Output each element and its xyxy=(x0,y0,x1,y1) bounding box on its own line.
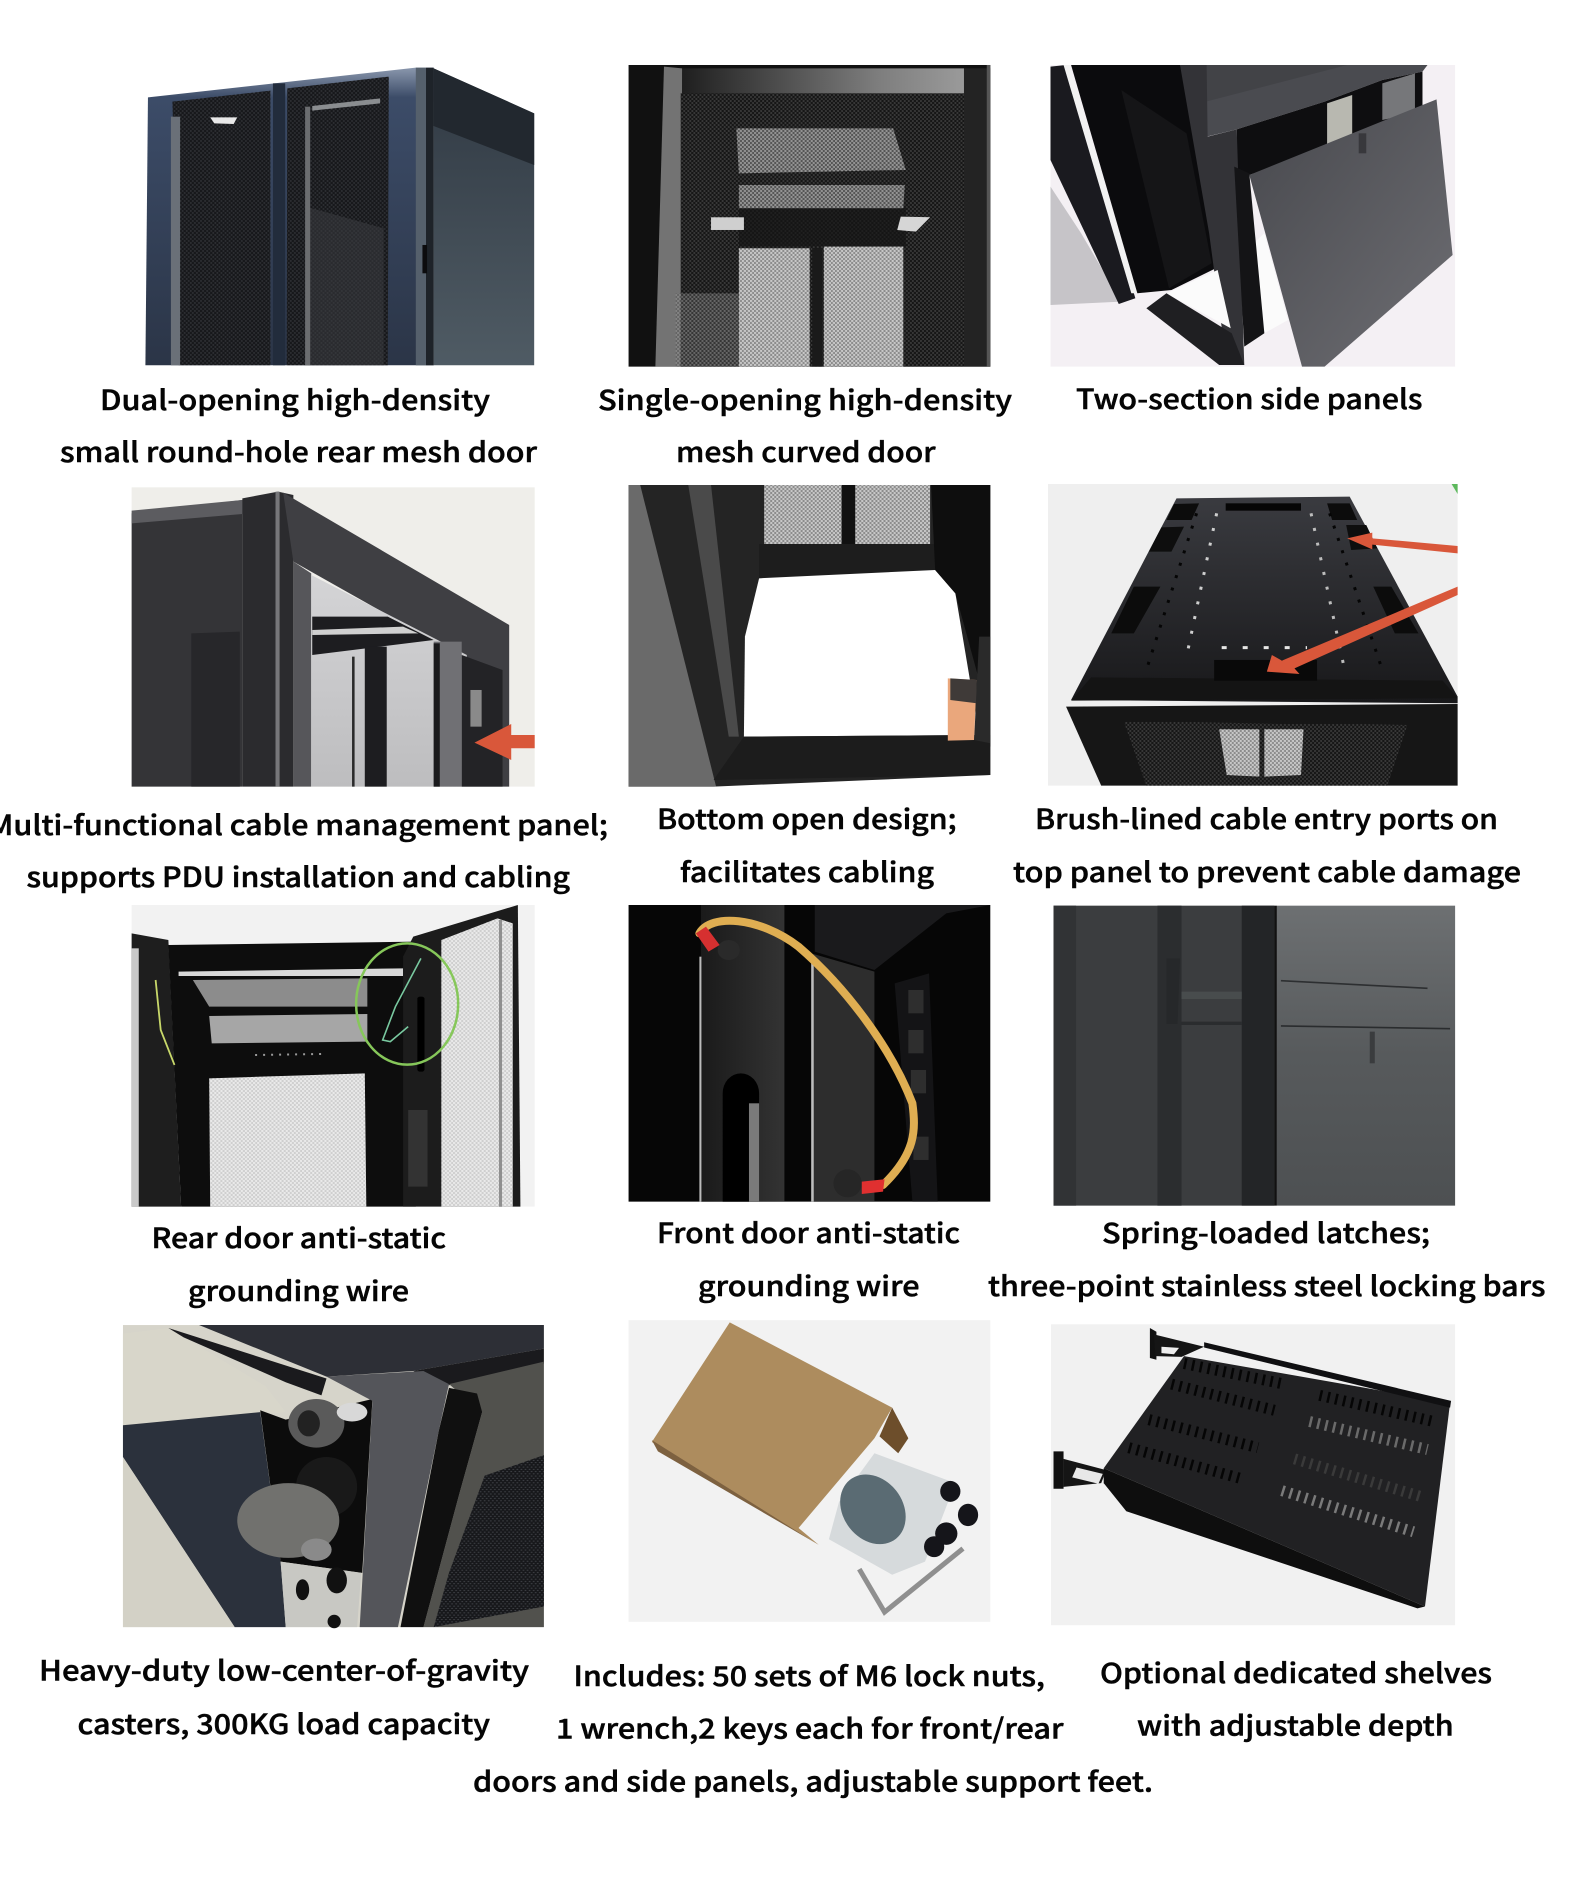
caption: single-opening xyxy=(598,378,1012,470)
caption: front door wire: Front door anti-static xyxy=(657,1211,960,1251)
panel: single-opening curved door xyxy=(598,65,1012,470)
panel: bottom open design xyxy=(629,485,990,890)
caption: rear door wire xyxy=(152,1216,446,1309)
caption: cable management: supports PDU installation and cabling xyxy=(26,855,570,895)
caption: brush-lined ports: Brush-lined cable entry ports on xyxy=(1035,797,1498,837)
photo: cabinet corner with arrow xyxy=(132,487,535,787)
photo: cabinet top panel with arrows xyxy=(1048,484,1458,786)
caption: bottom open: facilitates cabling xyxy=(680,850,934,890)
caption: rear door wire: grounding wire xyxy=(188,1269,409,1309)
panel: cable management panel xyxy=(0,487,608,895)
photo: yellow grounding wire xyxy=(629,905,990,1202)
caption: brush-lined ports xyxy=(1013,797,1521,890)
caption: latches: three-point stainless steel locking bars xyxy=(988,1264,1546,1304)
caption: side panels: Two-section side panels xyxy=(1076,377,1422,417)
caption: brush-lined ports: top panel to prevent cable damage xyxy=(1013,850,1521,890)
caption: rear door wire: Rear door anti-static xyxy=(152,1216,446,1256)
caption: included items: doors and side panels, adjustable support feet. xyxy=(473,1760,1153,1800)
caption: single-opening: Single-opening high-density xyxy=(598,378,1012,418)
caption: casters: Heavy-duty low-center-of-gravity xyxy=(39,1648,529,1688)
photo: box with nuts, keys and wrench xyxy=(629,1320,990,1622)
caption: casters xyxy=(39,1648,529,1742)
panel: included accessories xyxy=(473,1320,1153,1800)
panel: spring-loaded latches xyxy=(988,906,1546,1304)
caption: cable management: Multi-functional cable management panel; xyxy=(0,803,608,843)
caption: single-opening: mesh curved door xyxy=(676,430,936,470)
caption: shelves xyxy=(1100,1651,1492,1744)
caption: cable management xyxy=(0,803,608,895)
photo: dual-opening cabinet xyxy=(145,68,534,365)
caption: bottom open xyxy=(657,797,957,890)
photo: cabinet bottom opening xyxy=(629,485,990,787)
panel: rear door grounding wire xyxy=(132,905,535,1309)
panel: two-section side panels xyxy=(1050,65,1455,417)
caption: dual-opening: Dual-opening high-density xyxy=(100,378,490,418)
photo: caster under cabinet xyxy=(123,1325,544,1628)
caption: included items: Includes: 50 sets of M6 lock nuts, xyxy=(574,1654,1045,1694)
caption: bottom open: Bottom open design; xyxy=(657,797,957,837)
caption: dual-opening: small round-hole rear mesh door xyxy=(60,430,538,470)
caption: included items: 1 wrench,2 keys each for front/rear xyxy=(556,1706,1064,1746)
caption: dual-opening xyxy=(60,378,538,470)
photo: door and side latches xyxy=(1054,906,1455,1206)
photo: side panel leaning on cabinet xyxy=(1050,65,1455,367)
photo: rear doors open with green circle xyxy=(132,905,535,1207)
caption: shelves: with adjustable depth xyxy=(1137,1704,1454,1744)
caption: front door wire: grounding wire xyxy=(698,1264,920,1304)
caption: included items xyxy=(473,1654,1153,1800)
caption: casters: casters, 300KG load capacity xyxy=(78,1702,490,1742)
panel: dual-opening rear mesh door xyxy=(60,68,538,470)
panel: heavy-duty casters xyxy=(39,1325,544,1742)
caption: front door wire xyxy=(657,1211,960,1304)
caption: latches xyxy=(988,1211,1546,1304)
caption: latches: Spring-loaded latches; xyxy=(1102,1211,1430,1251)
panel: optional shelves xyxy=(1051,1324,1492,1744)
panel: brush-lined cable entry ports xyxy=(1013,484,1521,890)
panel: front door grounding wire xyxy=(629,905,990,1304)
caption: shelves: Optional dedicated shelves xyxy=(1100,1651,1492,1691)
photo: mesh curved door xyxy=(629,65,990,367)
photo: sliding shelf xyxy=(1051,1324,1455,1625)
